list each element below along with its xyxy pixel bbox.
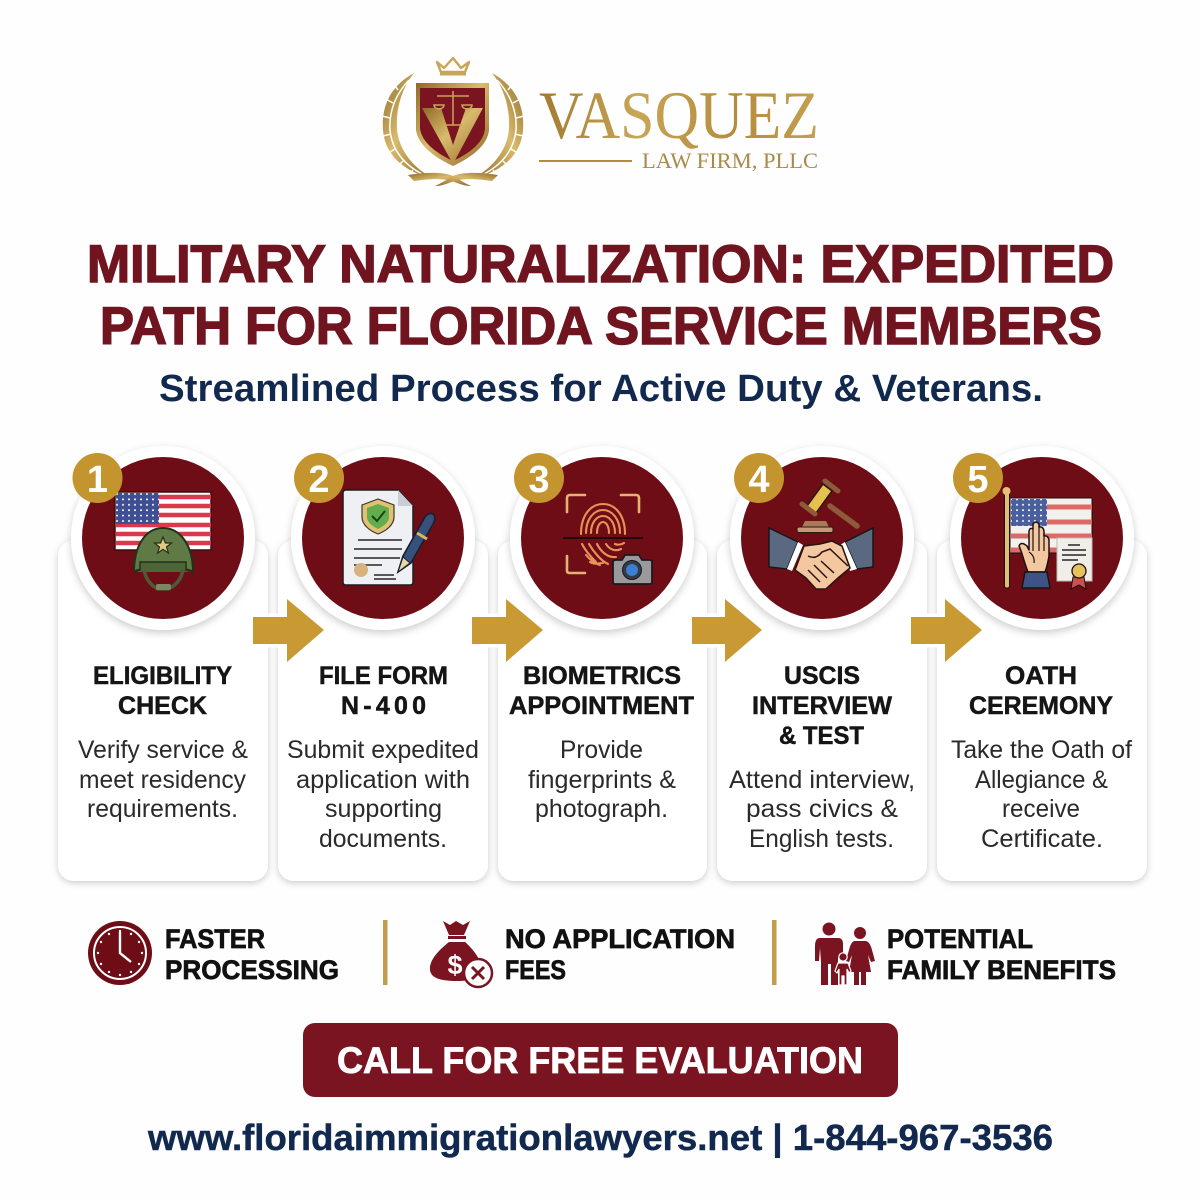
step 2 heading: N-400 (341, 692, 426, 720)
arrow: step 4 to 5 (911, 599, 982, 662)
step 4 text: Attend interview, (729, 766, 915, 794)
benefit label: NO APPLICATION (505, 924, 735, 954)
panel: step 2 card (278, 540, 488, 881)
benefit label: FASTER (165, 924, 265, 954)
badge: 5 (953, 453, 1003, 503)
step 1 heading (93, 662, 232, 720)
step 2 text: documents. (319, 825, 447, 853)
panel: step 1 card (58, 540, 268, 881)
benefit: potential family benefits (815, 922, 1116, 985)
title (87, 235, 1114, 356)
badge: 1: 1 (87, 459, 108, 501)
step 1 text (78, 736, 248, 823)
step 3 text: photograph. (535, 795, 668, 823)
step 2 text: application with (296, 766, 470, 794)
step 1 text: requirements. (87, 795, 238, 823)
contact line: www.floridaimmigrationlawyers.net | 1-844-967-3536 (147, 1117, 1053, 1159)
icon: step 3 fingerprint and camera (510, 446, 694, 630)
arrow: step 3 to 4 (692, 599, 762, 662)
step 2 heading (319, 662, 448, 720)
icon: money bag (430, 921, 492, 987)
step 2 text: Submit expedited (287, 736, 479, 764)
benefit label: POTENTIAL (887, 924, 1033, 954)
icon: step 4 gavel and handshake (730, 446, 914, 630)
step 5 text: receive (1002, 795, 1080, 823)
step 4 heading: INTERVIEW (752, 692, 892, 720)
icon: crown (437, 58, 469, 76)
icon: money bag: $ (447, 950, 463, 980)
step 4 text: pass civics & (746, 795, 898, 823)
step 3 heading (509, 662, 694, 720)
benefit label: PROCESSING (165, 955, 339, 985)
step 5 text: Certificate. (981, 825, 1103, 853)
step 5 text: Take the Oath of (951, 736, 1132, 764)
benefit label (165, 924, 339, 985)
step 1 text: meet residency (79, 766, 246, 794)
badge: 4: 4 (748, 459, 770, 501)
step 1 heading: CHECK (118, 692, 207, 720)
step 2 text (287, 736, 479, 853)
call to action button: CALL FOR FREE EVALUATION (337, 1040, 863, 1081)
benefit label: FAMILY BENEFITS (887, 955, 1116, 985)
icon: laurel wreath (382, 73, 524, 186)
step 5 text: Allegiance & (975, 766, 1108, 794)
badge: 2 (294, 453, 344, 503)
step 4 heading: USCIS (784, 662, 860, 690)
step 4 text: English tests. (749, 825, 894, 853)
step 4 heading: & TEST (779, 722, 864, 750)
arrow: step 2 to 3 (472, 599, 543, 662)
title: MILITARY NATURALIZATION: EXPEDITED (87, 235, 1114, 294)
step 5 heading: OATH (1005, 662, 1077, 690)
benefit: faster processing (88, 921, 339, 985)
step 3 heading: BIOMETRICS (523, 662, 681, 690)
step 3 text: Provide (560, 736, 643, 764)
subtitle: Streamlined Process for Active Duty & Veterans. (159, 368, 1043, 410)
step 5 heading (969, 662, 1113, 720)
icon: step 1 flag and helmet (71, 446, 255, 630)
logo subtitle: LAW FIRM, PLLC (642, 148, 818, 173)
icon: family (815, 922, 875, 985)
badge: 3 (514, 453, 564, 503)
benefit label (505, 924, 735, 985)
step 5 heading: CEREMONY (969, 692, 1113, 720)
arrow: step 1 to 2 (253, 599, 324, 662)
call to action button (303, 1023, 898, 1097)
logo: Vasquez Law Firm (382, 58, 819, 186)
step 1 text: Verify service & (78, 736, 248, 764)
badge: 2: 2 (308, 459, 330, 501)
title: PATH FOR FLORIDA SERVICE MEMBERS (100, 297, 1102, 356)
benefit label: FEES (505, 955, 566, 985)
badge: 3: 3 (528, 459, 550, 501)
step 4 heading (752, 662, 892, 750)
step 3 text: fingerprints & (528, 766, 676, 794)
step 5 text (951, 736, 1132, 853)
panel: step 4 card (717, 540, 927, 881)
step 2 text: supporting (325, 795, 442, 823)
panel: step 5 card (937, 540, 1147, 881)
icon: shield (416, 83, 489, 166)
icon: clock (88, 921, 152, 985)
icon: step 5 flag, oath hand and certificate (950, 446, 1134, 630)
badge: 1 (72, 453, 122, 503)
step 3 heading: APPOINTMENT (509, 692, 694, 720)
step 1 heading: ELIGIBILITY (93, 662, 232, 690)
benefit: no application fees (430, 921, 735, 987)
logo wordmark: VASQUEZ (539, 77, 819, 153)
benefit label (887, 924, 1116, 985)
step 4 text (729, 766, 915, 853)
panel: step 3 card (498, 540, 707, 881)
icon: step 2 document and pen (291, 446, 475, 630)
badge: 4 (734, 453, 784, 503)
step 2 heading: FILE FORM (319, 662, 448, 690)
step 3 text (528, 736, 676, 823)
badge: 5: 5 (967, 459, 989, 501)
